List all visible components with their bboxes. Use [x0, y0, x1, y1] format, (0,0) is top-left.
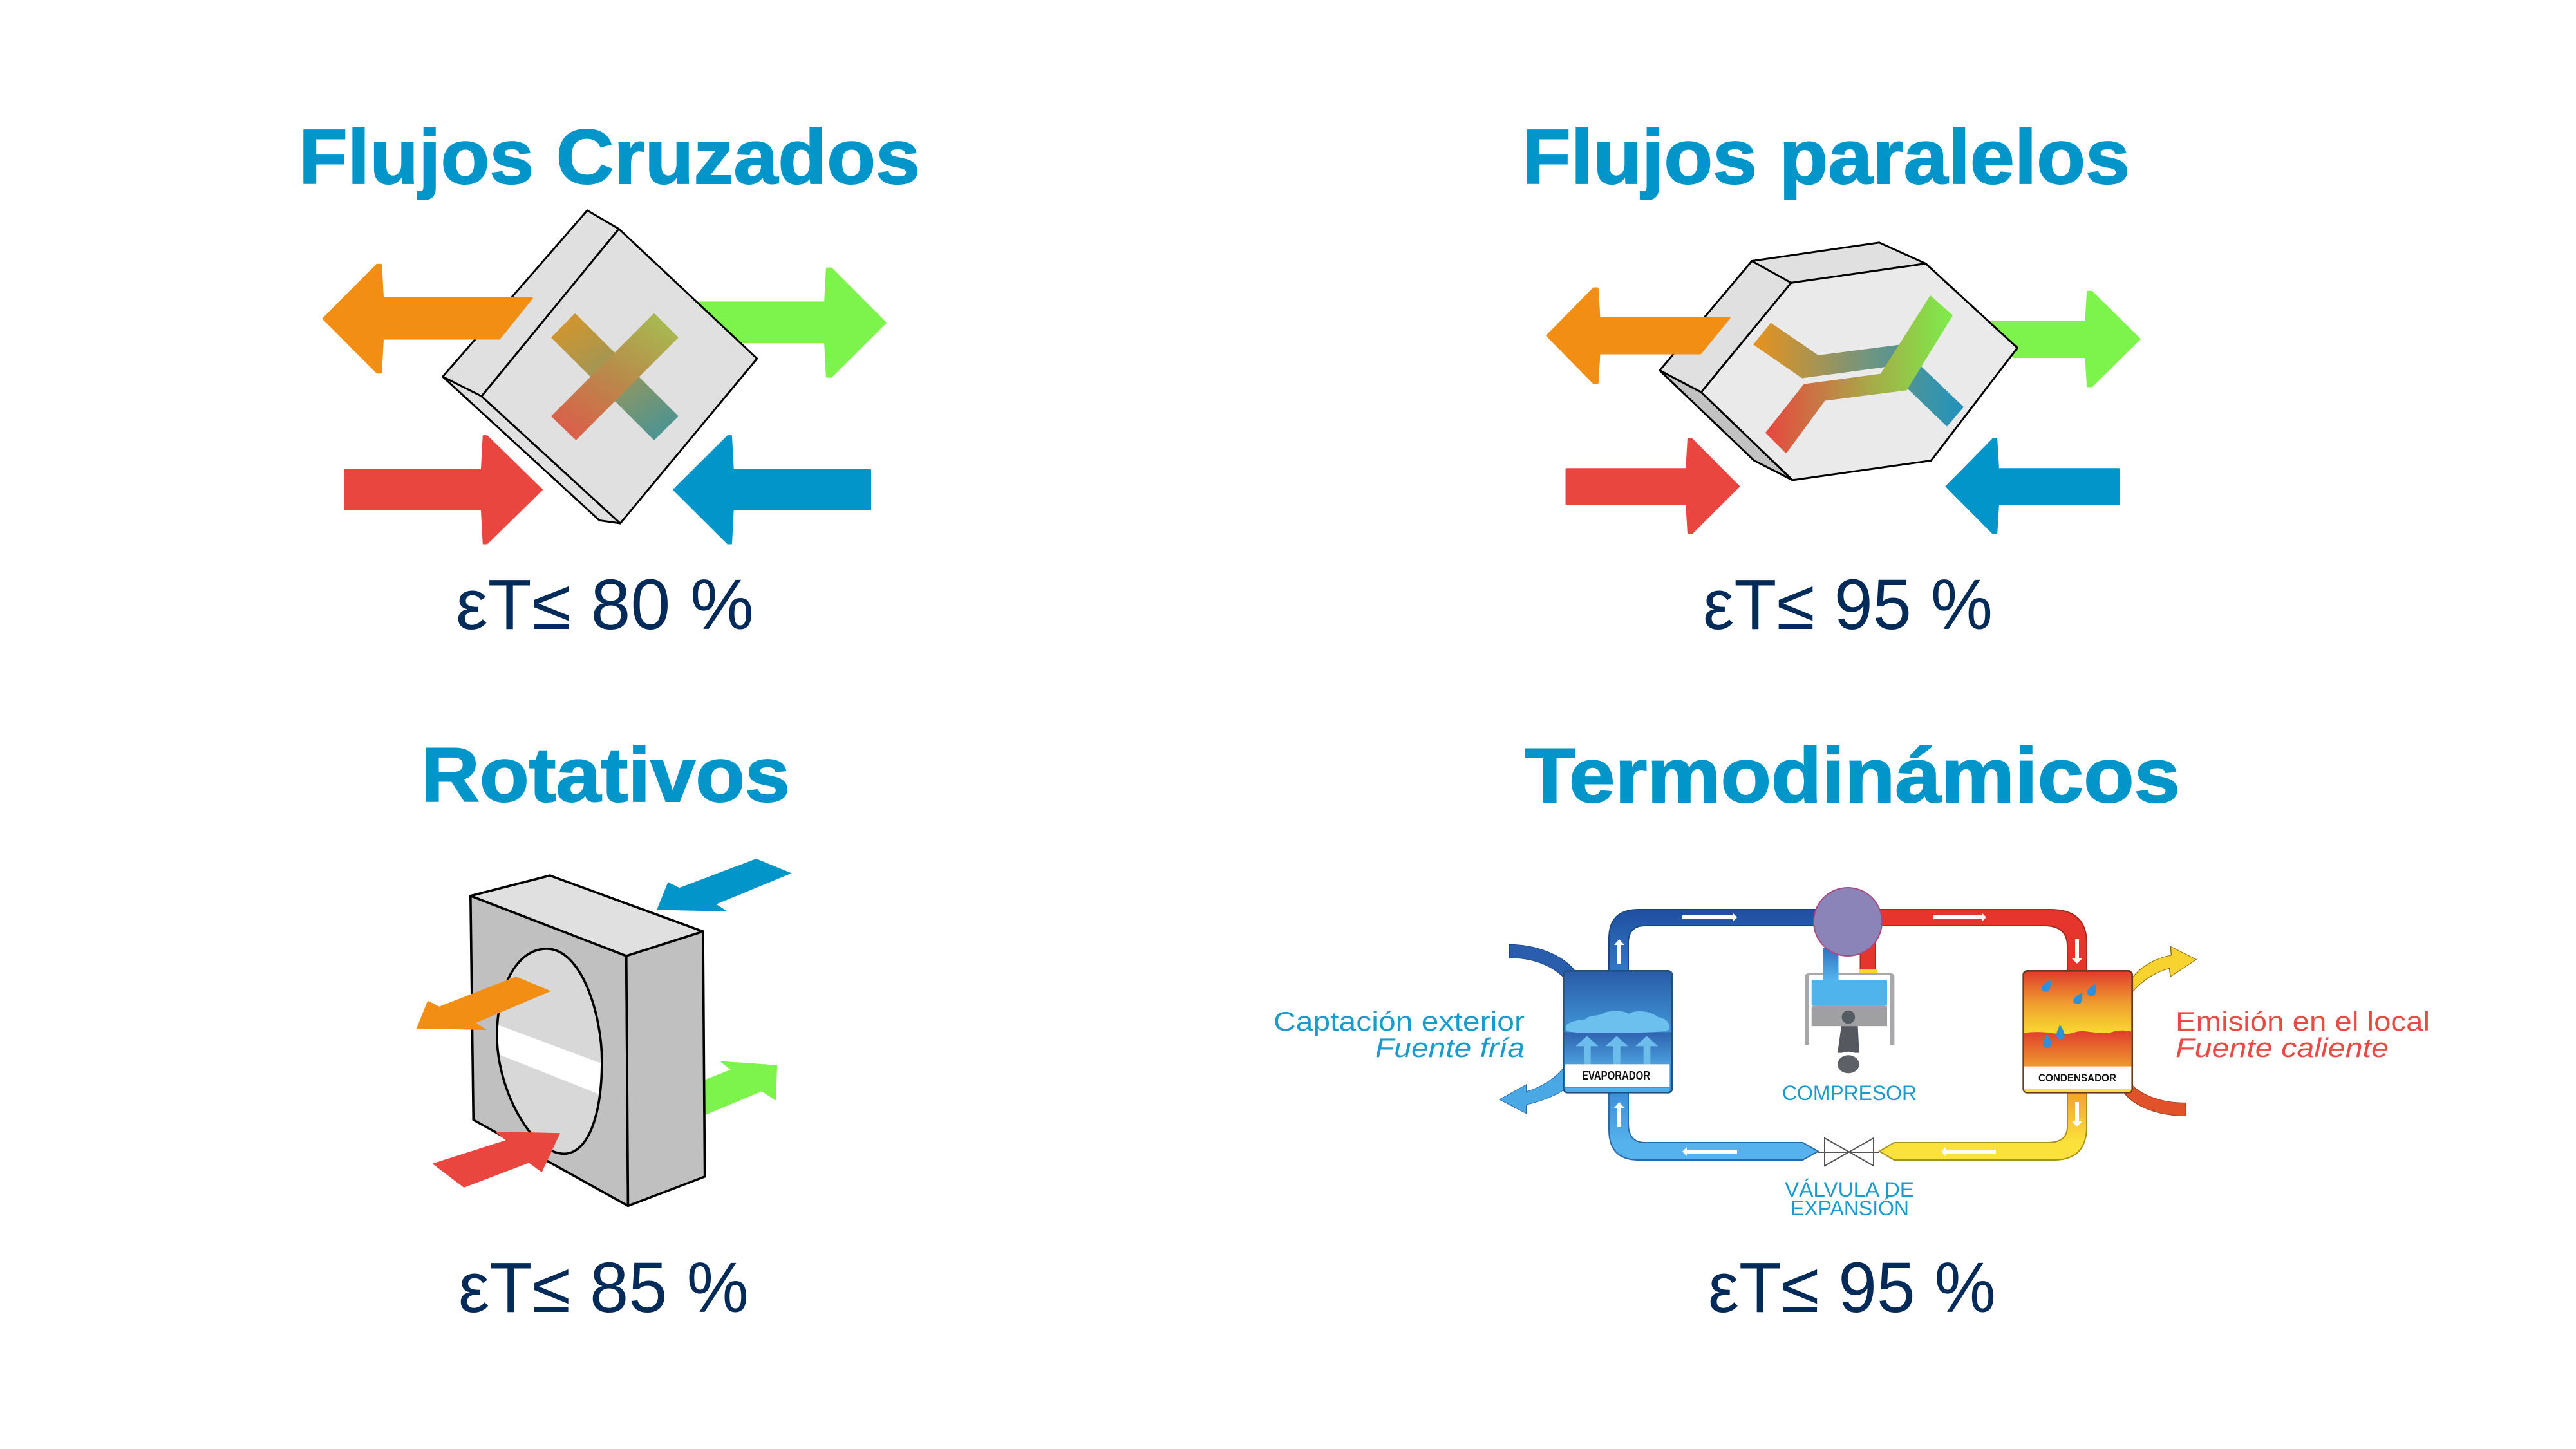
- efficiency value 95: εT≤ 95 %: [1703, 565, 1993, 644]
- panel: flujos cruzados: [299, 114, 920, 644]
- arrow: cold source in: [1509, 944, 1575, 977]
- icon: evaporator: [1563, 971, 1672, 1092]
- arrow: cold source out: [1500, 1069, 1565, 1114]
- diagram: cross-flow exchanger: [323, 210, 885, 544]
- arrow: orange outlet: [1547, 288, 1729, 383]
- heading: Termodinámicos: Termodinámicos: [1525, 733, 2180, 819]
- arrow: blue inlet: [1946, 439, 2119, 534]
- icon: compressor head: [1814, 888, 1882, 956]
- arrow: orange outlet: [323, 265, 532, 373]
- icon: compressor: [1807, 943, 1892, 1073]
- panel: rotativos: [417, 732, 791, 1327]
- arrow: blue inlet: [657, 859, 791, 911]
- pipe: cold bottom: [1609, 1091, 1818, 1160]
- icon: rotary wheel: [496, 949, 605, 1154]
- arrow: green outlet: [702, 1061, 777, 1116]
- arrow: heat emission out: [2132, 946, 2196, 991]
- arrow: green outlet: [698, 268, 885, 377]
- label: compresor: COMPRESOR: [1782, 1081, 1917, 1105]
- icon: casing: [471, 875, 705, 1206]
- arrow: green outlet: [1991, 292, 2139, 386]
- diagram: parallel-flow exchanger: [1547, 243, 2139, 534]
- pipe: hot top: [1874, 910, 2087, 972]
- arrow: heat return in: [2124, 1085, 2186, 1116]
- efficiency value 95: εT≤ 95 %: [1708, 1248, 1996, 1327]
- efficiency value 85: εT≤ 85 %: [458, 1248, 749, 1327]
- icon: parallel flows: [1753, 295, 1964, 454]
- panel: termodinamicos: [1274, 733, 2430, 1327]
- panel: flujos paralelos: [1522, 114, 2139, 644]
- label: condensador: CONDENSADOR: [2038, 1072, 2116, 1084]
- arrow: blue inlet: [673, 436, 870, 544]
- label: evaporador: EVAPORADOR: [1582, 1069, 1650, 1082]
- arrow: red inlet: [432, 1132, 560, 1188]
- label: captacion exterior: Captación exterior: [1274, 1006, 1525, 1036]
- heading: Rotativos: Rotativos: [421, 732, 790, 818]
- icon: exchanger box: [443, 210, 757, 523]
- label: fuente fria: Fuente fría: [1375, 1033, 1525, 1063]
- heading: Flujos paralelos: Flujos paralelos: [1522, 114, 2130, 200]
- arrows: flow direction: [1614, 913, 2082, 1156]
- arrow: red inlet: [344, 436, 542, 544]
- pipe: cold top: [1609, 910, 1822, 972]
- pipe: warm bottom: [1879, 1091, 2087, 1160]
- diagram: refrigeration cycle: [1500, 888, 2196, 1166]
- arrow: orange outlet: [417, 977, 551, 1030]
- label: valvula de expansion: VÁLVULA DE: [1785, 1178, 1914, 1201]
- icon: hexagonal exchanger: [1660, 243, 2017, 480]
- label: valvula de expansion: [1785, 1178, 1914, 1220]
- diagram: rotary wheel: [417, 859, 791, 1206]
- icon: condenser: [2024, 971, 2132, 1092]
- icon: cross flows: [551, 313, 679, 440]
- label: emision en el local: Emisión en el local: [2176, 1006, 2430, 1036]
- label: valvula de expansion: EXPANSIÓN: [1791, 1197, 1909, 1220]
- icon: expansion valve: [1818, 1138, 1879, 1166]
- heading: Flujos Cruzados: Flujos Cruzados: [299, 114, 920, 200]
- label: fuente caliente: Fuente caliente: [2176, 1033, 2389, 1063]
- arrow: red inlet: [1566, 439, 1739, 534]
- efficiency value 80: εT≤ 80 %: [456, 565, 754, 644]
